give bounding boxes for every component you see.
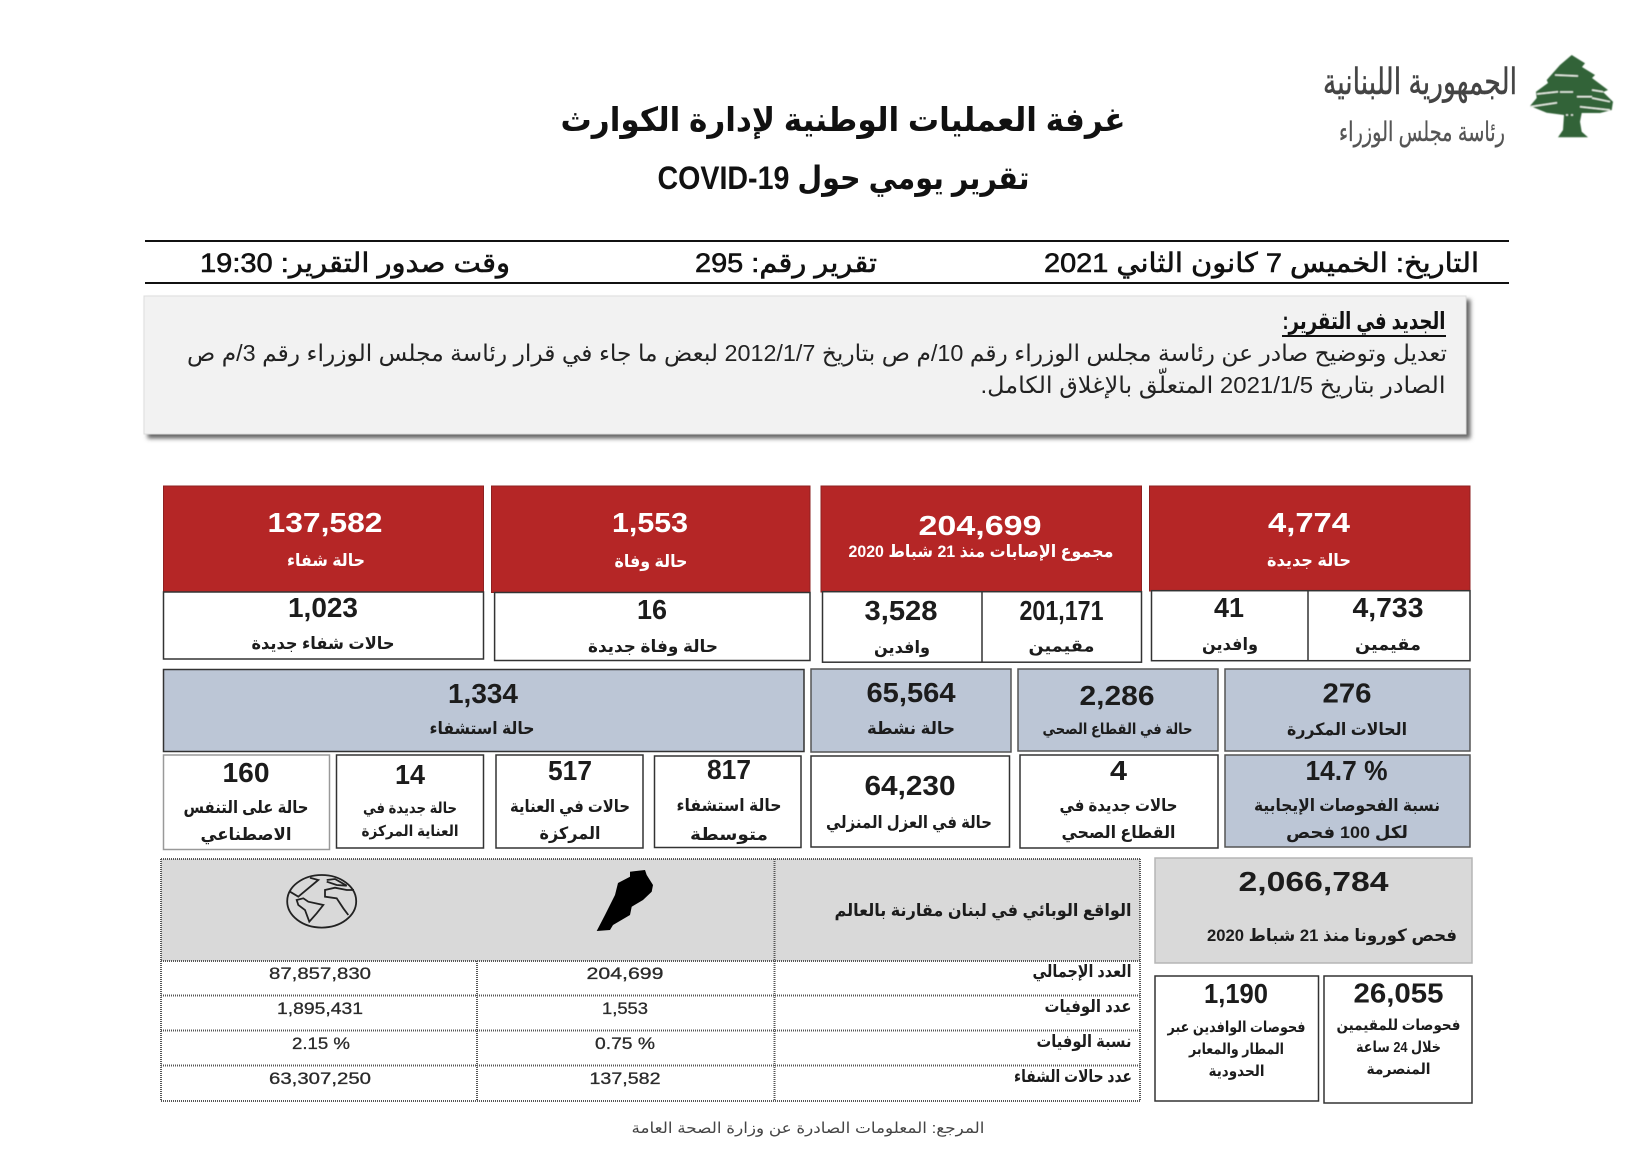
- label: حالة نشطة: [867, 719, 955, 738]
- row labels: عدد الوفيات: [1044, 997, 1132, 1017]
- panel: resident tests: [1324, 976, 1472, 1103]
- line 2: العناية المركزة: [362, 823, 458, 840]
- subtitle: تقرير يومي حول COVID-19: [658, 160, 1030, 197]
- line 2: لكل 100 فحص: [1286, 823, 1408, 843]
- date: التاريخ: الخميس 7 كانون الثاني 2021: [1044, 248, 1479, 279]
- line 1: فحوصات الوافدين عبر: [1167, 1019, 1306, 1036]
- panel: arrivals tests: [1155, 976, 1318, 1101]
- row labels: [1014, 962, 1132, 1086]
- label: حالة وفاة جديدة: [588, 637, 718, 657]
- body line 1: تعديل وتوضيح صادر عن رئاسة مجلس الوزراء رقم 10/م ص بتاريخ 2012/1/7 لبعض ما جاء في قرار رئاسة مجلس الوزراء رقم 3/م ص: [187, 340, 1447, 367]
- line 2: متوسطة: [690, 825, 768, 845]
- new cases total: 4,774: [1268, 507, 1350, 538]
- total deaths: 1,553: [612, 507, 688, 538]
- count: 517: [548, 755, 592, 786]
- card: new ICU: [336, 755, 484, 848]
- label: حالة جديدة: [1267, 551, 1351, 570]
- logo text: republic: الجمهورية اللبنانية: [1323, 61, 1517, 103]
- count: 4: [1110, 755, 1127, 786]
- label: مجموع الإصابات منذ 21 شباط 2020: [848, 542, 1114, 562]
- world column: 2.15 %: [292, 1034, 350, 1053]
- card: new healthcare cases: [1020, 755, 1218, 848]
- line 1: حالات في العناية: [510, 797, 630, 817]
- Lebanon column: 0.75 %: [595, 1034, 655, 1053]
- line 2: الاصطناعي: [200, 825, 292, 845]
- line 2: المطار والمعابر: [1188, 1041, 1284, 1058]
- world column: 63,307,250: [269, 1069, 371, 1088]
- residents: 4,733: [1352, 592, 1424, 623]
- icon: globe: [287, 875, 356, 928]
- label: وافدين: [874, 638, 930, 658]
- panel: active cases: [811, 669, 1011, 752]
- arrivals: 41: [1214, 592, 1244, 623]
- label: حالة شفاء: [287, 551, 365, 570]
- count: 26,055: [1354, 978, 1444, 1008]
- hospitalised count: 1,334: [448, 678, 518, 709]
- row labels: نسبة الوفيات: [1036, 1032, 1132, 1052]
- card: ICU: [496, 755, 643, 848]
- row labels: عدد حالات الشفاء: [1014, 1067, 1132, 1086]
- label: حالة وفاة: [614, 552, 688, 572]
- panel: total infections: [821, 486, 1142, 662]
- label: فحص كورونا منذ 21 شباط 2020: [1207, 926, 1457, 946]
- line 3: الحدودية: [1208, 1063, 1264, 1080]
- Lebanon column: [586, 964, 664, 1088]
- count: 14: [395, 759, 425, 790]
- total tests count: 2,066,784: [1238, 866, 1389, 897]
- line 1: حالات جديدة في: [1060, 796, 1178, 816]
- card: positivity rate: [1225, 755, 1470, 847]
- label: مقيمين: [1355, 635, 1421, 655]
- Lebanon column: 1,553: [602, 999, 648, 1018]
- count: 64,230: [864, 770, 956, 801]
- arrivals: 3,528: [864, 595, 938, 626]
- line 1: حالة على التنفس: [184, 798, 308, 817]
- world column: [269, 964, 371, 1088]
- label: مقيمين: [1028, 636, 1094, 656]
- new recoveries: 1,023: [288, 592, 358, 623]
- total recoveries: 137,582: [268, 507, 382, 538]
- icon: cedar tree: [1530, 55, 1613, 137]
- logo text: council: رئاسة مجلس الوزراء: [1339, 117, 1505, 148]
- icon: Lebanon map: [597, 870, 653, 931]
- Lebanon column: 204,699: [586, 964, 664, 983]
- Lebanon column: 137,582: [590, 1069, 660, 1088]
- label: حالة استشفاء: [430, 719, 534, 738]
- comparison table: Lebanon vs world: [161, 859, 1140, 1101]
- label: حالات شفاء جديدة: [252, 634, 394, 653]
- rate: 14.7 %: [1306, 755, 1388, 786]
- card: moderate hospitalisation: [654, 754, 801, 848]
- residents: 201,171: [1020, 595, 1104, 626]
- active count: 65,564: [866, 677, 956, 708]
- healthcare count: 2,286: [1080, 680, 1154, 711]
- card: ventilator: [164, 755, 330, 850]
- label: وافدين: [1202, 635, 1258, 655]
- label: الحالات المكررة: [1287, 720, 1407, 740]
- logo: Lebanese Republic Presidency of the Council of Ministers: [1323, 55, 1613, 148]
- report number: تقرير رقم: 295: [695, 248, 877, 279]
- world column: 87,857,830: [269, 964, 371, 983]
- row labels: العدد الإجمالي: [1032, 962, 1132, 982]
- body line 2: الصادر بتاريخ 2021/1/5 المتعلّق بالإغلاق الكامل.: [980, 368, 1446, 399]
- repeated count: 276: [1322, 678, 1372, 708]
- title: غرفة العمليات الوطنية لإدارة الكوارث: [560, 101, 1126, 140]
- label: حالة في القطاع الصحي: [1042, 721, 1192, 738]
- panel: new cases: [1150, 486, 1470, 661]
- panel: repeated cases: [1225, 669, 1470, 751]
- panel: what's new in the report: [144, 296, 1466, 434]
- total cases: 204,699: [918, 510, 1042, 541]
- heading: الجديد في التقرير:: [1282, 308, 1446, 335]
- count: 817: [707, 754, 751, 785]
- line 2: خلال 24 ساعة: [1356, 1039, 1441, 1056]
- panel: recoveries: [164, 486, 484, 659]
- line 1: نسبة الفحوصات الإيجابية: [1254, 796, 1440, 816]
- issue time: وقت صدور التقرير: 19:30: [200, 248, 510, 279]
- card: home isolation: [811, 756, 1010, 847]
- line 3: المنصرمة: [1366, 1061, 1430, 1078]
- line 2: القطاع الصحي: [1062, 823, 1176, 843]
- count: 1,190: [1204, 978, 1268, 1009]
- label: حالة في العزل المنزلي: [826, 813, 992, 833]
- table heading: الواقع الوبائي في لبنان مقارنة بالعالم: [834, 901, 1132, 921]
- panel: deaths: [492, 486, 810, 660]
- report meta bar: [145, 241, 1509, 283]
- panel: total tests: [1155, 858, 1472, 963]
- panel: healthcare sector cases: [1018, 669, 1218, 751]
- line 1: حالة جديدة في: [363, 800, 457, 817]
- count: 160: [222, 757, 270, 788]
- world column: 1,895,431: [277, 999, 363, 1018]
- line 1: فحوصات للمقيمين: [1336, 1017, 1460, 1034]
- line 2: المركزة: [540, 824, 600, 844]
- panel: hospitalised: [164, 670, 804, 752]
- line 1: حالة استشفاء: [676, 796, 782, 815]
- source note: المرجع: المعلومات الصادرة عن وزارة الصحة العامة: [632, 1120, 984, 1137]
- new deaths: 16: [637, 594, 667, 625]
